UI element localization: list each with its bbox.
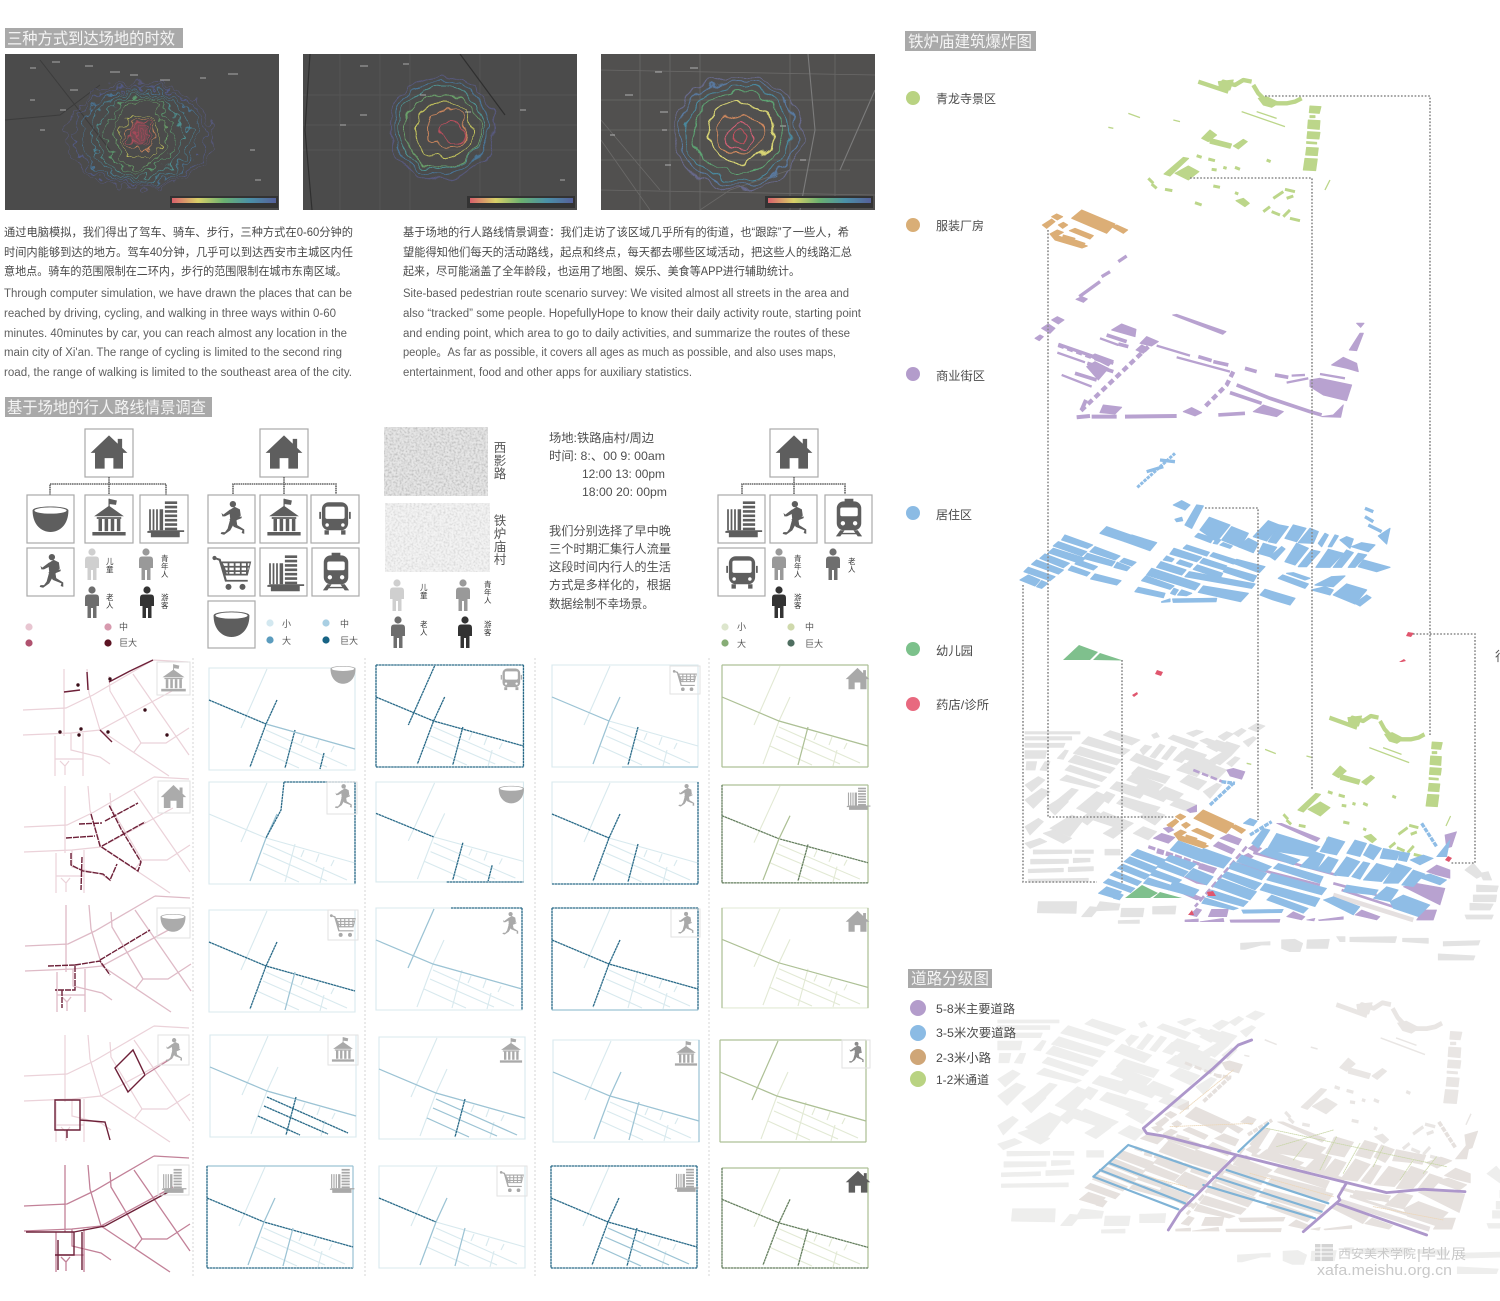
text block: site and time: 18:00 20: 00pm <box>582 485 667 499</box>
text block: simulation description <box>4 225 353 379</box>
panel: road density textures: 庙 <box>494 540 506 554</box>
panel: road density textures: 年 <box>484 587 492 597</box>
map: pink row 3 <box>25 896 191 1012</box>
panel: icon tree group A: 人 <box>106 601 114 610</box>
panel: road density textures: 儿 <box>420 583 428 592</box>
panel: icon tree group C: 游 <box>794 593 802 602</box>
panel: icon tree group C: 人 <box>794 570 802 579</box>
panel: cycling isochrone map <box>303 54 577 210</box>
road map building base <box>998 1003 1500 1274</box>
legend item: commercial street: 商业街区 <box>936 368 985 383</box>
map: blue column 2 row 3 <box>376 908 522 1010</box>
panel: icon tree group B: 巨大 <box>340 635 358 646</box>
map: pink row 5 <box>24 1156 190 1272</box>
heading: road hierarchy: 道路分级图 <box>911 970 989 988</box>
legend item: residential <box>906 506 972 522</box>
panel: icon tree group C: 中 <box>805 621 814 632</box>
column: green street maps <box>720 665 870 1268</box>
panel: road density textures: 路 <box>494 466 507 481</box>
text block: pedestrian survey description: also “tracked” some people. HopefullyHope to know their daily activity route, starting point <box>403 308 862 320</box>
panel: road density textures <box>384 427 507 648</box>
panel: icon tree group A <box>25 429 188 648</box>
map: blue column 2 row 2 <box>376 782 524 882</box>
legend: road widths <box>910 1000 1016 1087</box>
map: green row 4 <box>720 1040 870 1142</box>
panel: icon tree group C: 青 <box>794 554 802 563</box>
panel: icon tree group C: 人 <box>848 565 856 574</box>
text block: pedestrian survey description: 望能得知他们每天的活动路线，起点和终点，每天都去哪些区域活动，把这些人的线路汇总 <box>403 245 852 259</box>
map: blue column 3 row 3 <box>552 908 700 1010</box>
heading: travel time: 三种方式到达场地的时效 <box>7 30 175 48</box>
text block: pedestrian survey description: Site-based pedestrian route scenario survey: We visited almost all streets in the area and <box>403 288 849 300</box>
text block: simulation description: minutes. 40minutes by car, you can reach almost any location in the <box>4 328 347 340</box>
text block: site and time: 12:00 13: 00pm <box>582 467 665 481</box>
column: pink street maps <box>23 660 191 1272</box>
text block: simulation description: road, the range of walking is limited to the southeast area of the city. <box>4 367 352 379</box>
panel: road density textures: 炉 <box>494 527 506 541</box>
legend item: residential: 居住区 <box>936 508 972 522</box>
map: blue column 2 row 5 <box>379 1166 527 1268</box>
legend item: passage: 1-2米通道 <box>936 1073 989 1087</box>
map: blue column 1 row 1 <box>209 666 356 770</box>
main roads <box>1143 1040 1465 1235</box>
diagram: exploded building layers <box>1020 80 1498 960</box>
map: green row 3 <box>722 908 869 1008</box>
text block: site and time: 时间: 8:、00 9: 00am <box>549 449 665 463</box>
legend item: pharmacy and clinic: 药店/诊所 <box>936 698 989 712</box>
watermark: |毕业展 <box>1417 1246 1466 1262</box>
text block: site and time: 我们分别选择了早中晚 <box>549 523 671 538</box>
panel: road density textures: 铁 <box>494 514 506 528</box>
text block: simulation description: 时间内能够到达的地方。驾车40分钟，几乎可以到达西安市主城区内任 <box>4 245 353 259</box>
road network lines <box>1093 1040 1465 1235</box>
map: blue column 2 row 4 <box>379 1037 525 1139</box>
map: pink row 2 <box>24 777 190 893</box>
panel: icon tree group A: 儿 <box>106 557 114 566</box>
legend item: garment factory: 服装厂房 <box>936 218 984 233</box>
layer: purple commercial <box>1035 256 1364 417</box>
layer: pharmacy clinics <box>1132 632 1414 697</box>
composite base map <box>1025 716 1498 960</box>
panel: icon tree group B: 小 <box>282 619 291 629</box>
map: blue column 1 row 3 <box>209 910 358 1012</box>
text block: site and time: 三个时期汇集行人流量 <box>549 541 671 556</box>
panel: icon tree group A: 童 <box>106 564 114 574</box>
panel: icon tree group A: 人 <box>161 570 169 579</box>
column: blue street maps 1 <box>207 666 358 1268</box>
heading: pedestrian route survey: 基于场地的行人路线情景调查 <box>7 399 206 417</box>
map: blue column 3 row 1 <box>552 665 700 767</box>
legend item: kindergarten <box>906 642 973 658</box>
panel: icon tree group A: 游 <box>161 593 168 602</box>
text block: pedestrian survey description: people。As far as possible, it covers all ages as much as possible, and also uses maps, <box>403 347 836 359</box>
panel: icon tree group A: 年 <box>161 561 169 571</box>
panel: icon tree group A: 巨大 <box>119 637 137 648</box>
map: pink row 4 <box>24 1026 190 1142</box>
map: green row 1 <box>722 665 869 767</box>
legend item: main road: 5-8米主要道路 <box>936 1001 1015 1016</box>
layer: blue residential <box>1020 453 1390 606</box>
text block: simulation description: 通过电脑模拟，我们得出了驾车、骑车、步行，三种方式在0-60分钟的 <box>4 225 353 239</box>
watermark: 西安美术学院 <box>1338 1246 1416 1261</box>
panel: icon tree group A: 中 <box>119 621 128 632</box>
legend item: secondary road: 3-5米次要道路 <box>936 1025 1016 1040</box>
map: blue column 2 row 1 <box>376 665 523 767</box>
panel: icon tree group A: 青 <box>161 554 168 563</box>
panel: walking isochrone map <box>601 54 875 210</box>
legend item: garment factory <box>906 218 984 233</box>
legend item: temple scenic area: 青龙寺景区 <box>936 92 996 106</box>
connector lines <box>1023 96 1475 883</box>
panel: icon tree group B: 中 <box>340 618 349 629</box>
text block: site and time: 数据绘制不幸场景。 <box>549 596 654 611</box>
layer: green temple area <box>1108 80 1330 221</box>
panel: road density textures: 村 <box>494 553 507 567</box>
panel: icon tree group C: 巨大 <box>805 638 823 649</box>
column: blue street maps 2 <box>376 665 527 1268</box>
panel: icon tree group C: 客 <box>794 600 802 610</box>
diagram: road hierarchy map <box>998 1003 1500 1274</box>
map: green row 2 <box>722 785 870 883</box>
panel: icon tree group B <box>208 429 359 648</box>
panel: road density textures: 青 <box>484 580 492 589</box>
column: blue street maps 3 <box>551 665 700 1268</box>
panel: road density textures: 人 <box>420 628 428 637</box>
map: blue column 1 row 5 <box>207 1166 354 1268</box>
panel: road density textures: 西 <box>494 441 506 455</box>
legend: building types <box>906 91 996 712</box>
panel: road density textures: 影 <box>494 454 507 468</box>
layer: kindergarten <box>1063 645 1123 660</box>
text block: site and time <box>549 430 671 611</box>
text block: site and time: 场地:铁路庙村/周边 <box>549 430 654 445</box>
text block: pedestrian survey description <box>403 225 862 379</box>
panel: icon tree group A: 客 <box>161 600 169 610</box>
text block: simulation description: 意地点。骑车的范围限制在二环内，步行的范围限制在城市东南区域。 <box>4 264 347 278</box>
panel: icon tree group C: 小 <box>737 622 746 632</box>
text block: simulation description: Through computer simulation, we have drawn the places that can be <box>4 288 352 300</box>
panel: icon tree group C: 年 <box>794 561 802 571</box>
watermark: xafa.meishu.org.cn <box>1317 1262 1452 1279</box>
text block: pedestrian survey description: entertainment, food and other apps for auxiliary statistics. <box>403 367 692 379</box>
panel: icon tree group B: 大 <box>282 635 291 646</box>
map: blue column 1 row 2 <box>209 782 357 884</box>
panel: icon tree group C <box>718 429 872 649</box>
legend item: lane: 2-3米小路 <box>936 1050 991 1065</box>
panel: road density textures: 人 <box>484 596 492 605</box>
panel: road density textures: 游 <box>484 620 492 629</box>
text block: site and time: 方式是多样化的，根据 <box>549 577 671 592</box>
watermark <box>1315 1244 1466 1279</box>
panel: road density textures: 客 <box>484 627 492 637</box>
panel: road density textures: 老 <box>420 620 428 629</box>
panel: driving isochrone map <box>5 54 279 210</box>
map: blue column 3 row 5 <box>551 1166 698 1268</box>
text block: simulation description: reached by driving, cycling, and walking in three ways within 0-60 <box>4 308 336 320</box>
legend item: commercial street <box>906 367 985 383</box>
legend item: temple scenic area <box>906 91 996 106</box>
heading: exploded diagram: 铁炉庙建筑爆炸图 <box>908 32 1032 51</box>
layer: orange factory <box>1042 210 1128 248</box>
panel: icon tree group C: 老 <box>848 557 856 566</box>
panel: icon tree group A: 老 <box>106 593 114 602</box>
map: green row 5 <box>722 1168 870 1268</box>
panel: road density textures: 童 <box>420 590 428 600</box>
legend item: kindergarten: 幼儿园 <box>936 644 973 658</box>
legend item: pharmacy and clinic <box>906 697 989 712</box>
map: blue column 1 row 4 <box>210 1035 358 1137</box>
map: pink row 1 <box>23 660 190 776</box>
text block: pedestrian survey description: 基于场地的行人路线情景调查：我们走访了该区域几乎所有的街道，也“跟踪”了一些人，希 <box>403 225 849 239</box>
panel: icon tree group C: 大 <box>737 638 746 649</box>
text block: pedestrian survey description: 起来，尽可能涵盖了全年龄段，也运用了地图、娱乐、美食等APP进行辅助统计。 <box>403 264 800 278</box>
text block: simulation description: main city of Xi'an. The range of cycling is limited to the second ring <box>4 347 342 359</box>
text block: pedestrian survey description: and ending point, which area to go to daily activities, and summarize the routes of these <box>403 328 850 340</box>
secondary roads <box>1093 1123 1328 1218</box>
text block: site and time: 这段时间内行人的生活 <box>549 559 671 574</box>
map: blue column 3 row 4 <box>553 1040 699 1142</box>
map: blue column 3 row 2 <box>552 782 698 884</box>
